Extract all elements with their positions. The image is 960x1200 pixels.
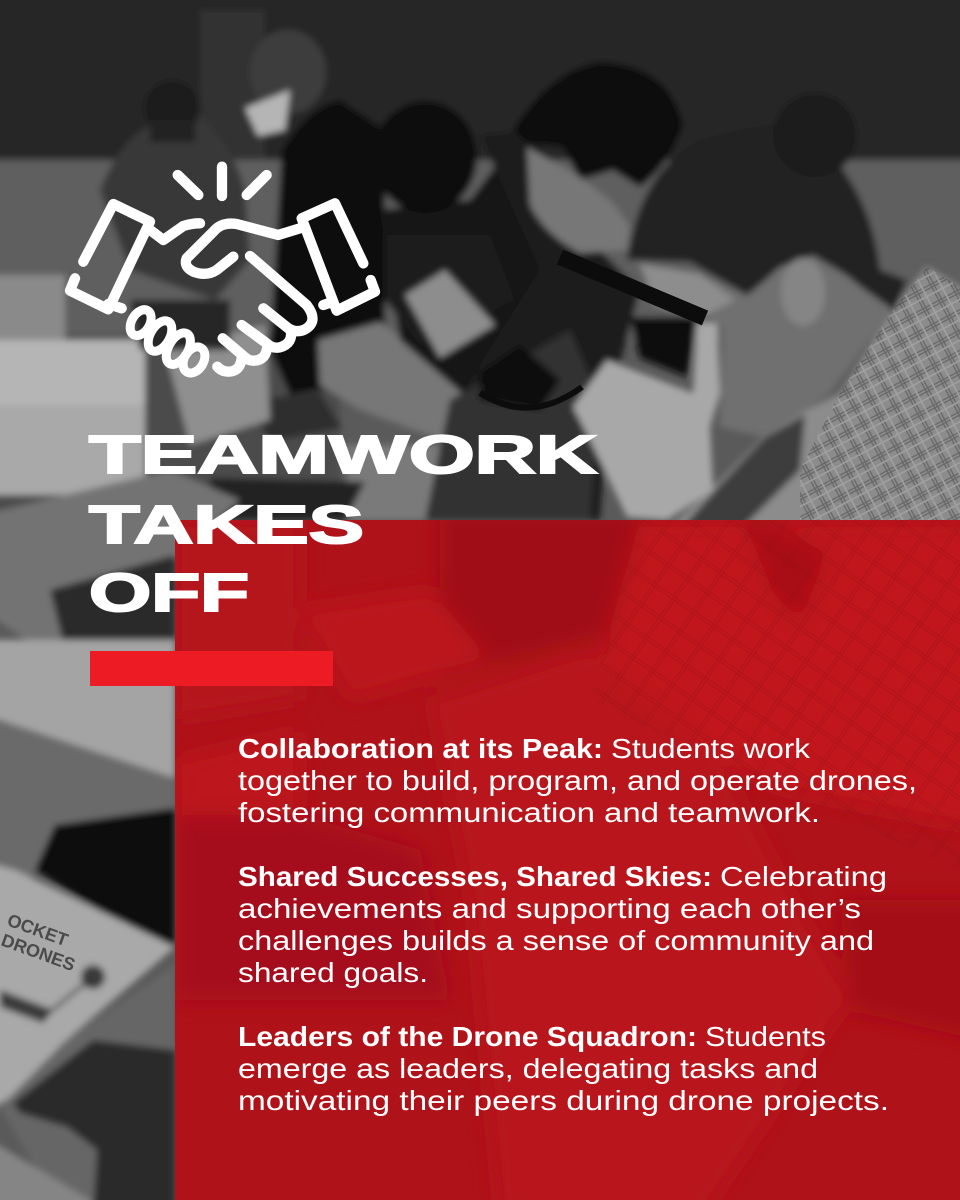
- icon sparks: [178, 167, 267, 196]
- paragraph: collaboration: Students work: [611, 733, 810, 764]
- icon right fingers: [217, 256, 312, 372]
- body text: [238, 733, 917, 1116]
- goggle strap: [560, 257, 705, 318]
- paragraph: leaders: Students: [705, 1021, 826, 1052]
- paragraph: leaders: [238, 1021, 889, 1116]
- hands and drone goggles: [385, 235, 515, 345]
- title: TAKES: [89, 495, 364, 555]
- paragraph: collaboration: Collaboration at its Peak:: [238, 733, 603, 764]
- paragraph: leaders: motivating their peers during drone projects.: [238, 1085, 889, 1116]
- paragraph: collaboration: fostering communication and teamwork.: [238, 797, 820, 828]
- grey trousers and shoe: [318, 322, 475, 445]
- icon right cuff: [302, 203, 375, 311]
- hand on goggles: [573, 323, 720, 520]
- fourth student: [425, 130, 640, 520]
- paragraph: collaboration: [238, 733, 917, 828]
- goggle cable: [480, 387, 582, 408]
- paragraph: shared successes: shared goals.: [238, 957, 428, 988]
- shirt plaid texture: [800, 267, 960, 530]
- icon: handshake with spark lines: [70, 167, 375, 377]
- paragraph: collaboration: together to build, program, and operate drones,: [238, 765, 917, 796]
- paragraph: shared successes: achievements and supporting each other’s: [238, 893, 861, 924]
- paragraph: leaders: Leaders of the Drone Squadron:: [238, 1021, 697, 1052]
- second student, black hoodie: [270, 100, 385, 395]
- shirt plaid texture tinted: [590, 520, 960, 880]
- title: TEAMWORK: [89, 425, 597, 485]
- title: [89, 425, 597, 623]
- paragraph: shared successes: [238, 861, 887, 988]
- icon left fingers: [126, 306, 155, 339]
- red panel with tinted photo: [175, 510, 960, 1200]
- plaid shirt student: [667, 267, 960, 530]
- paragraph: shared successes: Shared Successes, Shared Skies:: [238, 861, 712, 892]
- lower left floor, case and boxes: [0, 640, 175, 778]
- third student: [380, 120, 585, 400]
- box label: OCKET: [5, 910, 71, 950]
- paragraph: shared successes: Celebrating: [720, 861, 887, 892]
- paragraph: leaders: emerge as leaders, delegating tasks and: [238, 1053, 818, 1084]
- boxes: [0, 340, 145, 425]
- title: OFF: [89, 563, 249, 623]
- wall and floor: [0, 0, 960, 165]
- paragraph: shared successes: challenges builds a sense of community and: [238, 925, 874, 956]
- icon upper hand: [151, 223, 300, 274]
- accent bar: [90, 651, 333, 686]
- box label: DRONES: [0, 930, 78, 975]
- far-left student: [100, 115, 250, 300]
- icon left cuff: [70, 204, 150, 309]
- box label: [0, 910, 78, 975]
